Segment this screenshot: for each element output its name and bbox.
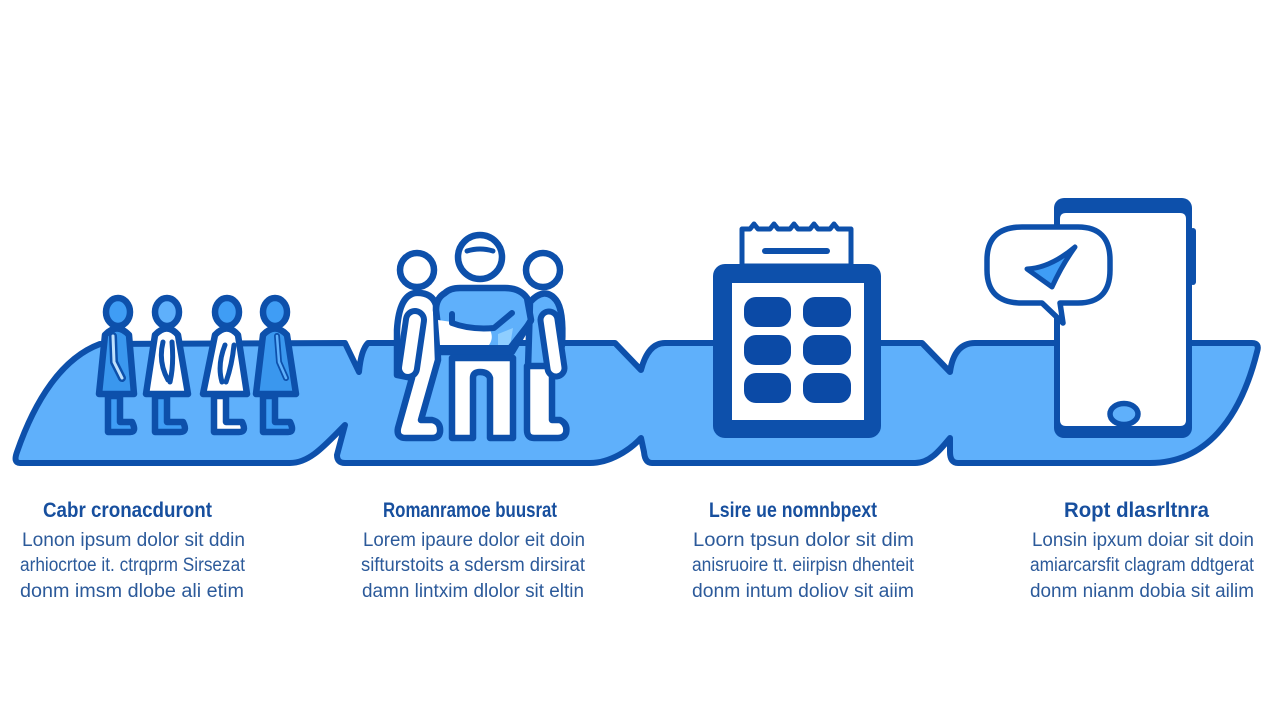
paper line (762, 248, 830, 254)
step 4 body (1030, 530, 1255, 602)
step 2 caption (361, 499, 586, 602)
step 2 body: Lorem ipaure dolor eit doin (363, 530, 585, 551)
step 1 body (20, 530, 246, 602)
step 3 body (692, 530, 915, 602)
ribbon band (16, 343, 1258, 463)
paper with torn top (742, 224, 851, 266)
centre head (458, 235, 502, 279)
step 1 heading: Cabr cronacduront (43, 499, 212, 522)
phone screen (1060, 213, 1186, 426)
step 3 body: Loorn tpsun dolor sit dim (693, 530, 914, 551)
left person (397, 253, 440, 438)
message bubble (987, 227, 1110, 323)
step 4 body: amiarcarsfit clagram ddtgerat (1030, 555, 1255, 576)
keypad buttons (744, 297, 851, 403)
icon: calendar keypad (713, 224, 881, 438)
step 3 heading: Lsire ue nomnbpext (709, 499, 877, 522)
clasped arms (438, 313, 531, 348)
icon: four small figures (99, 298, 296, 432)
step 2 body: damn lintxim dlolor sit eltin (362, 581, 584, 602)
step 1 caption (20, 499, 246, 602)
step 4 caption (1030, 499, 1255, 602)
home button (1110, 404, 1138, 424)
keypad screen (732, 283, 864, 420)
figure 2 (146, 298, 188, 432)
icon: three people group (397, 235, 566, 438)
step 3 body: donm intum doliov sit aiim (692, 581, 914, 602)
step 2 body (361, 530, 586, 602)
step 4 body: donm nianm dobia sit ailim (1030, 581, 1254, 602)
phone body (1054, 198, 1192, 438)
step 2 body: sifturstoits a sdersm dirsirat (361, 555, 586, 576)
step 1 body: arhiocrtoe it. ctrqprm Sirsezat (20, 555, 246, 576)
keypad frame (713, 264, 881, 438)
step 4 body: Lonsin ipxum doiar sit doin (1032, 530, 1254, 551)
figure 4 (256, 298, 296, 432)
step 4 heading: Ropt dlasrltnra (1064, 499, 1209, 522)
phone side button (1190, 228, 1196, 285)
step 3 body: anisruoire tt. eiirpisn dhenteit (692, 555, 915, 576)
figure 1 (99, 298, 134, 432)
send arrow (1027, 247, 1075, 287)
step 1 body: Lonon ipsum dolor sit ddin (22, 530, 245, 551)
step 1 body: donm imsm dlobe ali etim (20, 581, 244, 602)
step 2 heading: Romanramoe buusrat (383, 499, 557, 522)
centre legs (452, 358, 513, 438)
centre torso (436, 288, 531, 352)
right person (526, 253, 566, 438)
figure 3 (203, 298, 247, 432)
step 3 caption (692, 499, 915, 602)
icon: phone with message bubble (987, 198, 1196, 438)
